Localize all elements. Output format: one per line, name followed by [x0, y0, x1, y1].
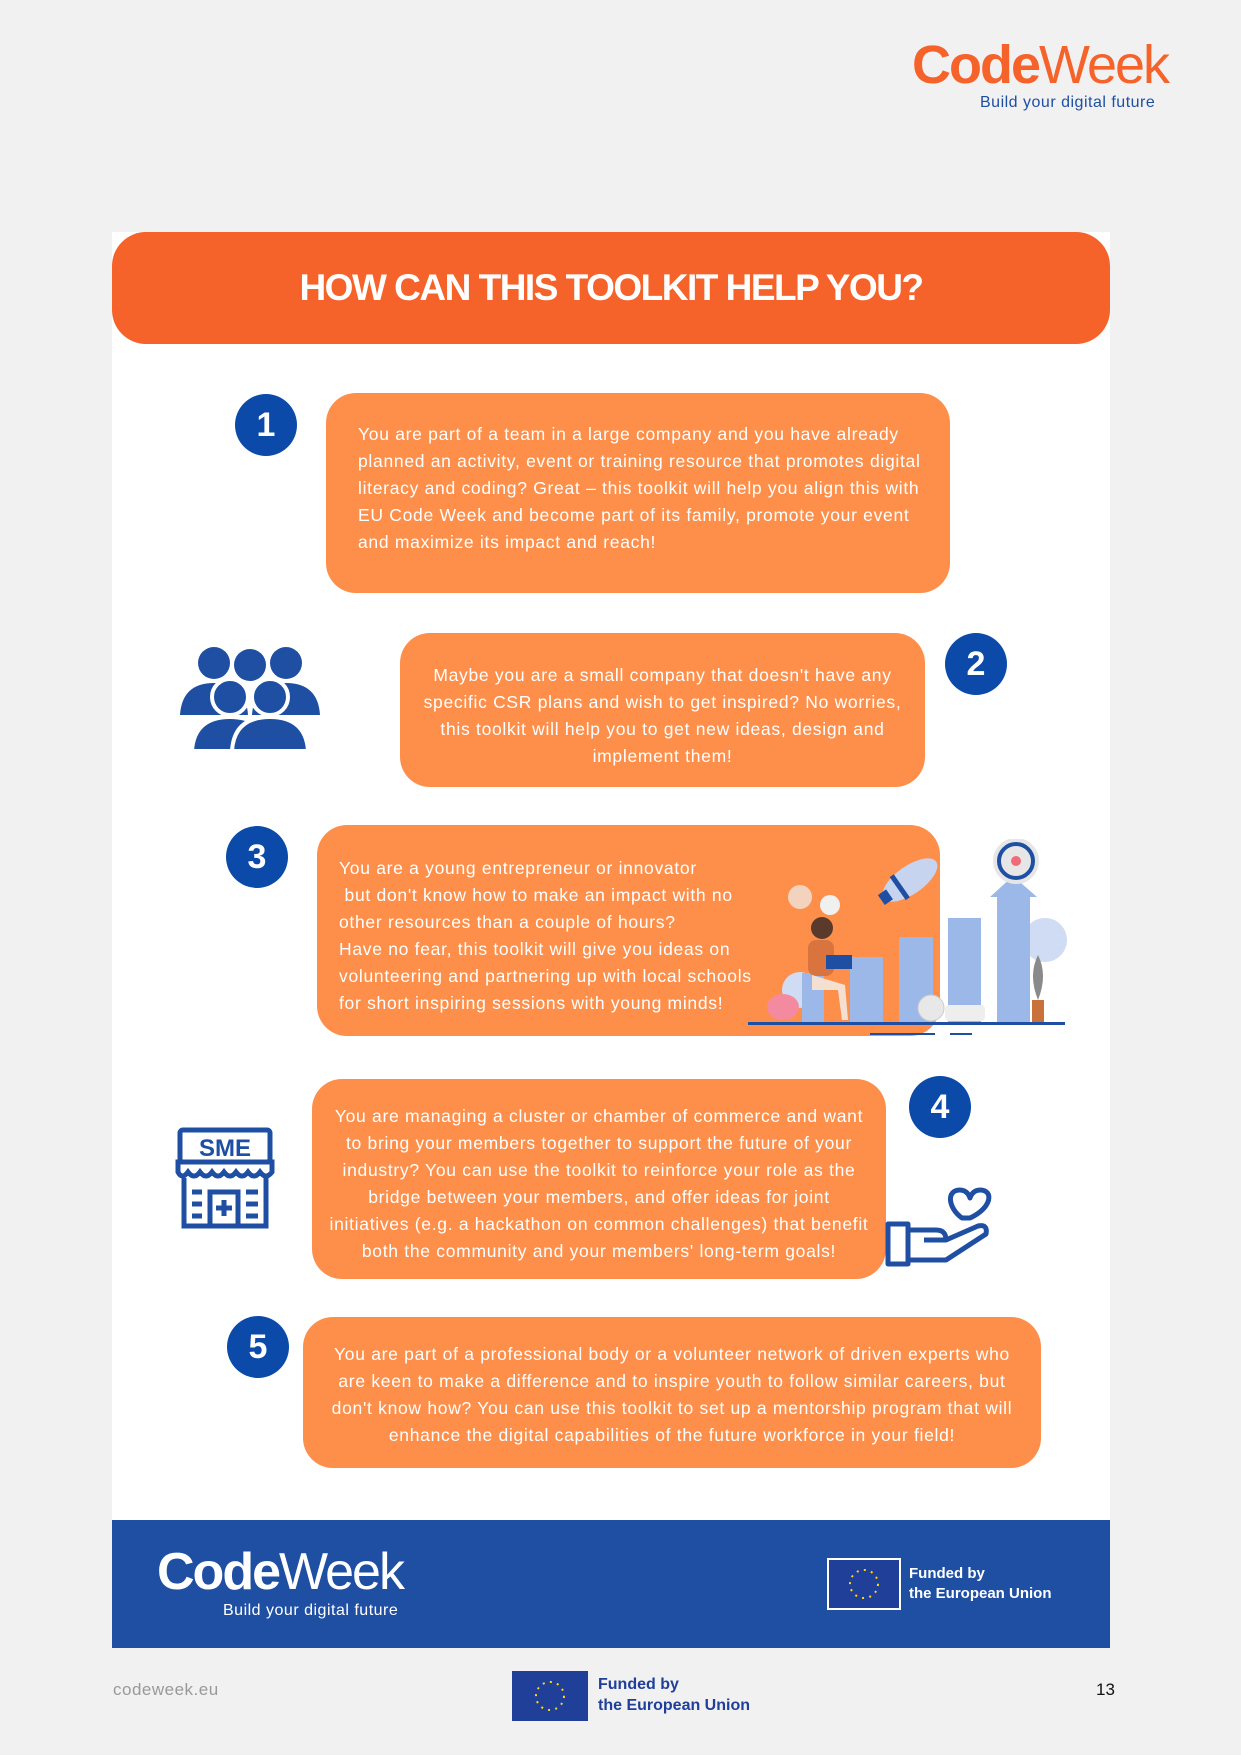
icon: hand with heart — [886, 1188, 992, 1266]
icon: people group — [180, 647, 320, 749]
box 3: other resources than a couple of hours? — [339, 912, 676, 932]
number 1: 1 — [257, 406, 275, 444]
box 2: specific CSR plans and wish to get inspired? No worries, — [424, 692, 901, 712]
page url: codeweek.eu — [113, 1680, 219, 1699]
icon: SME shop: SME — [199, 1135, 251, 1162]
top logo: CodeWeek — [912, 35, 1168, 95]
box 1 — [326, 393, 950, 593]
number 3: 3 — [248, 838, 266, 876]
top logo: Build your digital future — [980, 94, 1155, 111]
footer banner — [112, 1520, 1110, 1648]
box 1: You are part of a team in a large company and you have already — [358, 424, 899, 444]
box 4 — [312, 1079, 886, 1279]
box 1: literacy and coding? Great – this toolkit will help you align this with — [358, 478, 919, 498]
box 3: volunteering and partnering up with local schools — [339, 966, 752, 986]
footer logo: Build your digital future — [223, 1602, 398, 1619]
box 3: for short inspiring sessions with young minds! — [339, 993, 723, 1013]
box 4: You are managing a cluster or chamber of commerce and want — [335, 1106, 863, 1126]
box 1: planned an activity, event or training resource that promotes digital — [358, 451, 921, 471]
bottom EU funding — [512, 1671, 750, 1721]
number 4 — [909, 1076, 971, 1138]
box 4: bridge between your members, and offer ideas for joint — [368, 1187, 830, 1207]
footer EU funding: the European Union — [909, 1585, 1052, 1602]
number 1 — [235, 394, 297, 456]
box 3: You are a young entrepreneur or innovator — [339, 858, 697, 878]
box 5 — [303, 1317, 1041, 1468]
illustration: growth chart — [748, 839, 1067, 1035]
number 2 — [945, 633, 1007, 695]
header banner — [112, 232, 1110, 344]
footer logo: CodeWeek — [157, 1543, 403, 1601]
box 2: Maybe you are a small company that doesn't have any — [433, 665, 892, 685]
number 5 — [227, 1316, 289, 1378]
number 4: 4 — [931, 1088, 949, 1126]
footer EU funding — [827, 1558, 1052, 1610]
box 4: both the community and your members' long-term goals! — [362, 1241, 836, 1261]
box 3 — [317, 825, 940, 1036]
box 1: EU Code Week and become part of its family, promote your event — [358, 505, 909, 525]
box 3: Have no fear, this toolkit will give you ideas on — [339, 939, 730, 959]
number 3 — [226, 826, 288, 888]
number 5: 5 — [249, 1328, 267, 1366]
icon: SME shop — [176, 1128, 274, 1228]
footer EU funding: Funded by — [909, 1565, 985, 1582]
box 4: industry? You can use the toolkit to reinforce your role as the — [342, 1160, 856, 1180]
box 2: implement them! — [593, 746, 732, 766]
box 2 — [400, 633, 925, 787]
box 5: are keen to make a difference and to inspire youth to follow similar careers, but — [338, 1371, 1006, 1391]
box 2: this toolkit will help you to get new ideas, design and — [440, 719, 885, 739]
white panel — [112, 232, 1110, 1522]
box 5: enhance the digital capabilities of the future workforce in your field! — [389, 1425, 955, 1445]
box 1: and maximize its impact and reach! — [358, 532, 656, 552]
bottom EU funding: Funded by — [598, 1676, 679, 1693]
box 5: don't know how? You can use this toolkit to set up a mentorship program that will — [332, 1398, 1012, 1418]
number 2: 2 — [967, 645, 985, 683]
box 5: You are part of a professional body or a volunteer network of driven experts who — [334, 1344, 1010, 1364]
header banner: HOW CAN THIS TOOLKIT HELP YOU? — [299, 267, 923, 308]
box 4: initiatives (e.g. a hackathon on common challenges) that benefit — [330, 1214, 868, 1234]
box 3: but don't know how to make an impact with no — [345, 885, 733, 905]
page number: 13 — [1096, 1680, 1115, 1699]
box 4: to bring your members together to support the future of your — [346, 1133, 852, 1153]
bottom EU funding: the European Union — [598, 1697, 750, 1714]
